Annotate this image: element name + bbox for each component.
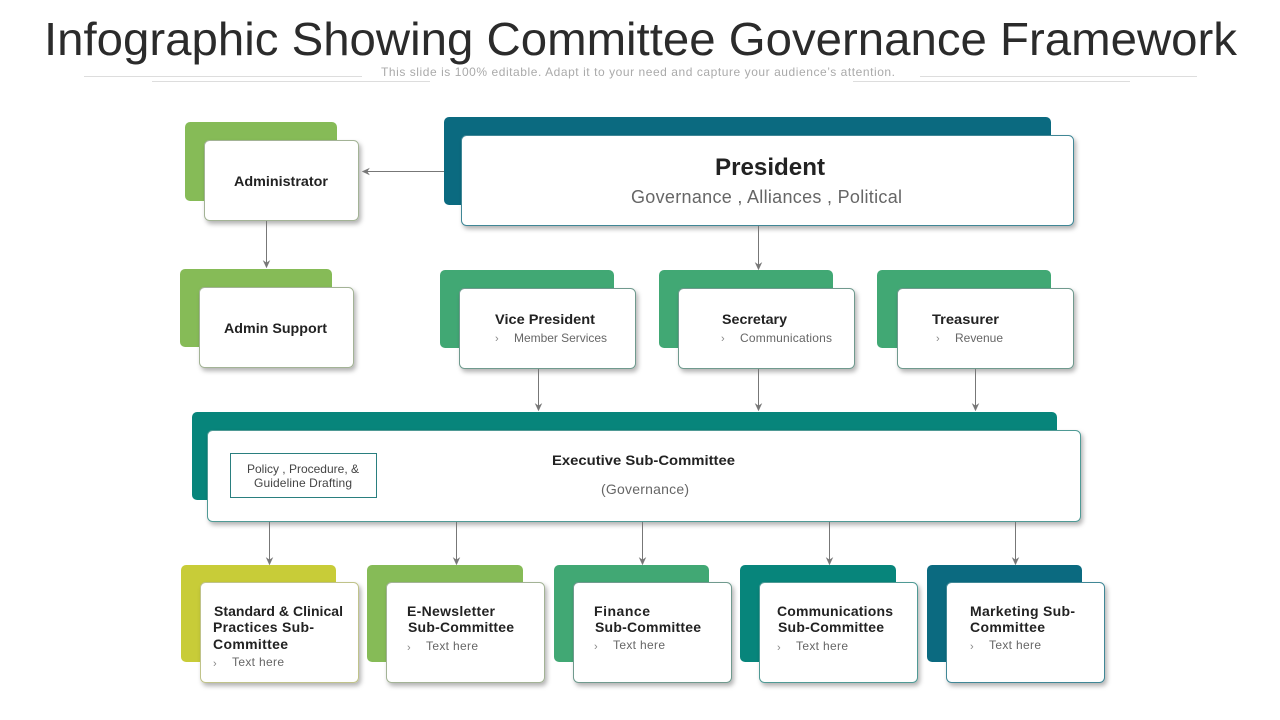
card: Standard & Clinical Practices Sub-Committee: Practices Sub- — [213, 619, 314, 635]
panel: Executive Sub-Committee — [192, 412, 1080, 522]
card: Secretary: Secretary — [722, 311, 787, 327]
arrow: Executive to Finance — [640, 522, 646, 564]
panel: Executive Sub-Committee: (Governance) — [601, 481, 689, 497]
card: Admin Support — [180, 269, 354, 368]
card: Administrator — [185, 122, 358, 220]
card: Marketing Sub-Committee — [927, 565, 1104, 682]
callout: policy box: Policy , Procedure, & — [247, 462, 359, 476]
card: Secretary: › — [721, 333, 725, 345]
card: Standard & Clinical Practices Sub-Committee: › — [213, 658, 217, 670]
card: Vice President: Vice President — [495, 311, 595, 327]
card: Vice President: Member Services — [514, 331, 607, 345]
card: Treasurer: Treasurer — [932, 311, 1000, 327]
arrow: Executive to E-Newsletter — [454, 522, 460, 564]
card: Finance Sub-Committee: Text here — [613, 638, 665, 652]
card: E-Newsletter Sub-Committee: Text here — [426, 639, 478, 653]
card: Administrator: Administrator — [234, 173, 329, 189]
card: Finance Sub-Committee: Sub-Committee — [595, 619, 701, 635]
card: Standard & Clinical Practices Sub-Committee: Committee — [213, 636, 288, 652]
arrow: Administrator to Admin Support — [264, 221, 270, 268]
arrow: Executive to Communications — [826, 522, 832, 564]
panel: Executive Sub-Committee: Executive Sub-Committee — [552, 452, 735, 468]
arrow: Secretary to Executive — [756, 369, 762, 410]
title: Infographic Showing Committee Governance Framework — [44, 13, 1238, 65]
arrow: President to Administrator — [362, 168, 444, 174]
arrow: President to Secretary — [756, 226, 762, 270]
card: E-Newsletter Sub-Committee: E-Newsletter — [407, 603, 496, 619]
arrow: Vice President to Executive — [536, 369, 542, 410]
card: President: Governance , Alliances , Political — [631, 187, 902, 207]
callout: policy box — [230, 454, 376, 498]
card: E-Newsletter Sub-Committee — [367, 565, 544, 682]
card: Admin Support: Admin Support — [224, 320, 327, 336]
card: President — [444, 117, 1074, 226]
arrow: Executive to Standard & Clinical — [266, 522, 272, 564]
card: Standard & Clinical Practices Sub-Committee — [181, 565, 358, 682]
card: Communications Sub-Committee: Text here — [796, 639, 848, 653]
arrow: Executive to Marketing — [1012, 522, 1018, 564]
card: President: President — [715, 154, 825, 181]
card: Secretary: Communications — [740, 331, 832, 345]
callout: policy box: Guideline Drafting — [254, 476, 352, 490]
card: E-Newsletter Sub-Committee: Sub-Committee — [408, 619, 514, 635]
card: Vice President — [440, 270, 636, 368]
card: Finance Sub-Committee: › — [594, 641, 598, 653]
card: E-Newsletter Sub-Committee: › — [407, 642, 411, 654]
card: Marketing Sub-Committee: › — [970, 641, 974, 653]
subtitle: This slide is 100% editable. Adapt it to your need and capture your audience’s attention. — [381, 65, 895, 79]
card: Marketing Sub-Committee: Marketing Sub- — [970, 603, 1075, 619]
card: Marketing Sub-Committee: Committee — [970, 619, 1045, 635]
card: Communications Sub-Committee: Communications — [777, 603, 893, 619]
arrow: Treasurer to Executive — [972, 369, 978, 410]
card: Communications Sub-Committee: › — [777, 642, 781, 654]
card: Treasurer: › — [936, 333, 940, 345]
card: Finance Sub-Committee — [554, 565, 732, 682]
card: Treasurer: Revenue — [955, 331, 1003, 345]
card: Communications Sub-Committee: Sub-Committee — [778, 619, 884, 635]
card: Standard & Clinical Practices Sub-Committee: Text here — [232, 655, 284, 669]
card: Vice President: › — [495, 333, 499, 345]
card: Finance Sub-Committee: Finance — [594, 603, 650, 619]
card: Standard & Clinical Practices Sub-Committee: Standard & Clinical — [214, 603, 343, 619]
card: Secretary — [659, 270, 854, 368]
card: Treasurer — [877, 270, 1074, 368]
card: Marketing Sub-Committee: Text here — [989, 638, 1041, 652]
card: Communications Sub-Committee — [740, 565, 918, 682]
